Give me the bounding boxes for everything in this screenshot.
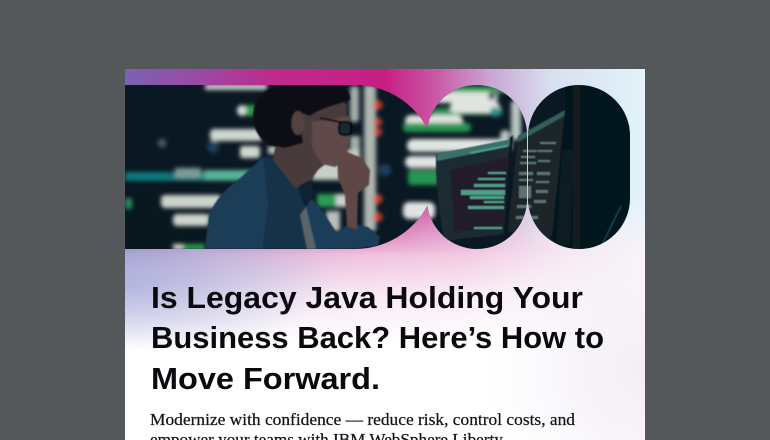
shirt [205,157,380,249]
person [205,85,380,249]
panel: gradient card [125,69,645,440]
title line 2: Business Back? Here’s How to [151,320,604,355]
neck and face [273,92,347,188]
subtitle [150,410,576,440]
title line 3: Move Forward. [151,361,380,396]
report cover infographic [125,69,645,440]
photo: woman looking at code on monitors [125,84,630,250]
monitor 2 [508,110,565,248]
title [151,280,604,396]
hair [253,85,350,148]
glasses [320,118,345,123]
title line 1: Is Legacy Java Holding Your [151,280,583,315]
background bokeh lights [125,84,521,250]
subtitle line 1: Modernize with confidence — reduce risk, control costs, and [150,410,576,429]
laptop screens [436,85,630,249]
monitor stands and dark panel [552,85,630,249]
second pill lights [449,86,509,93]
hand and forearm [337,151,370,230]
ear [292,111,304,135]
monitor 1 [436,139,512,241]
